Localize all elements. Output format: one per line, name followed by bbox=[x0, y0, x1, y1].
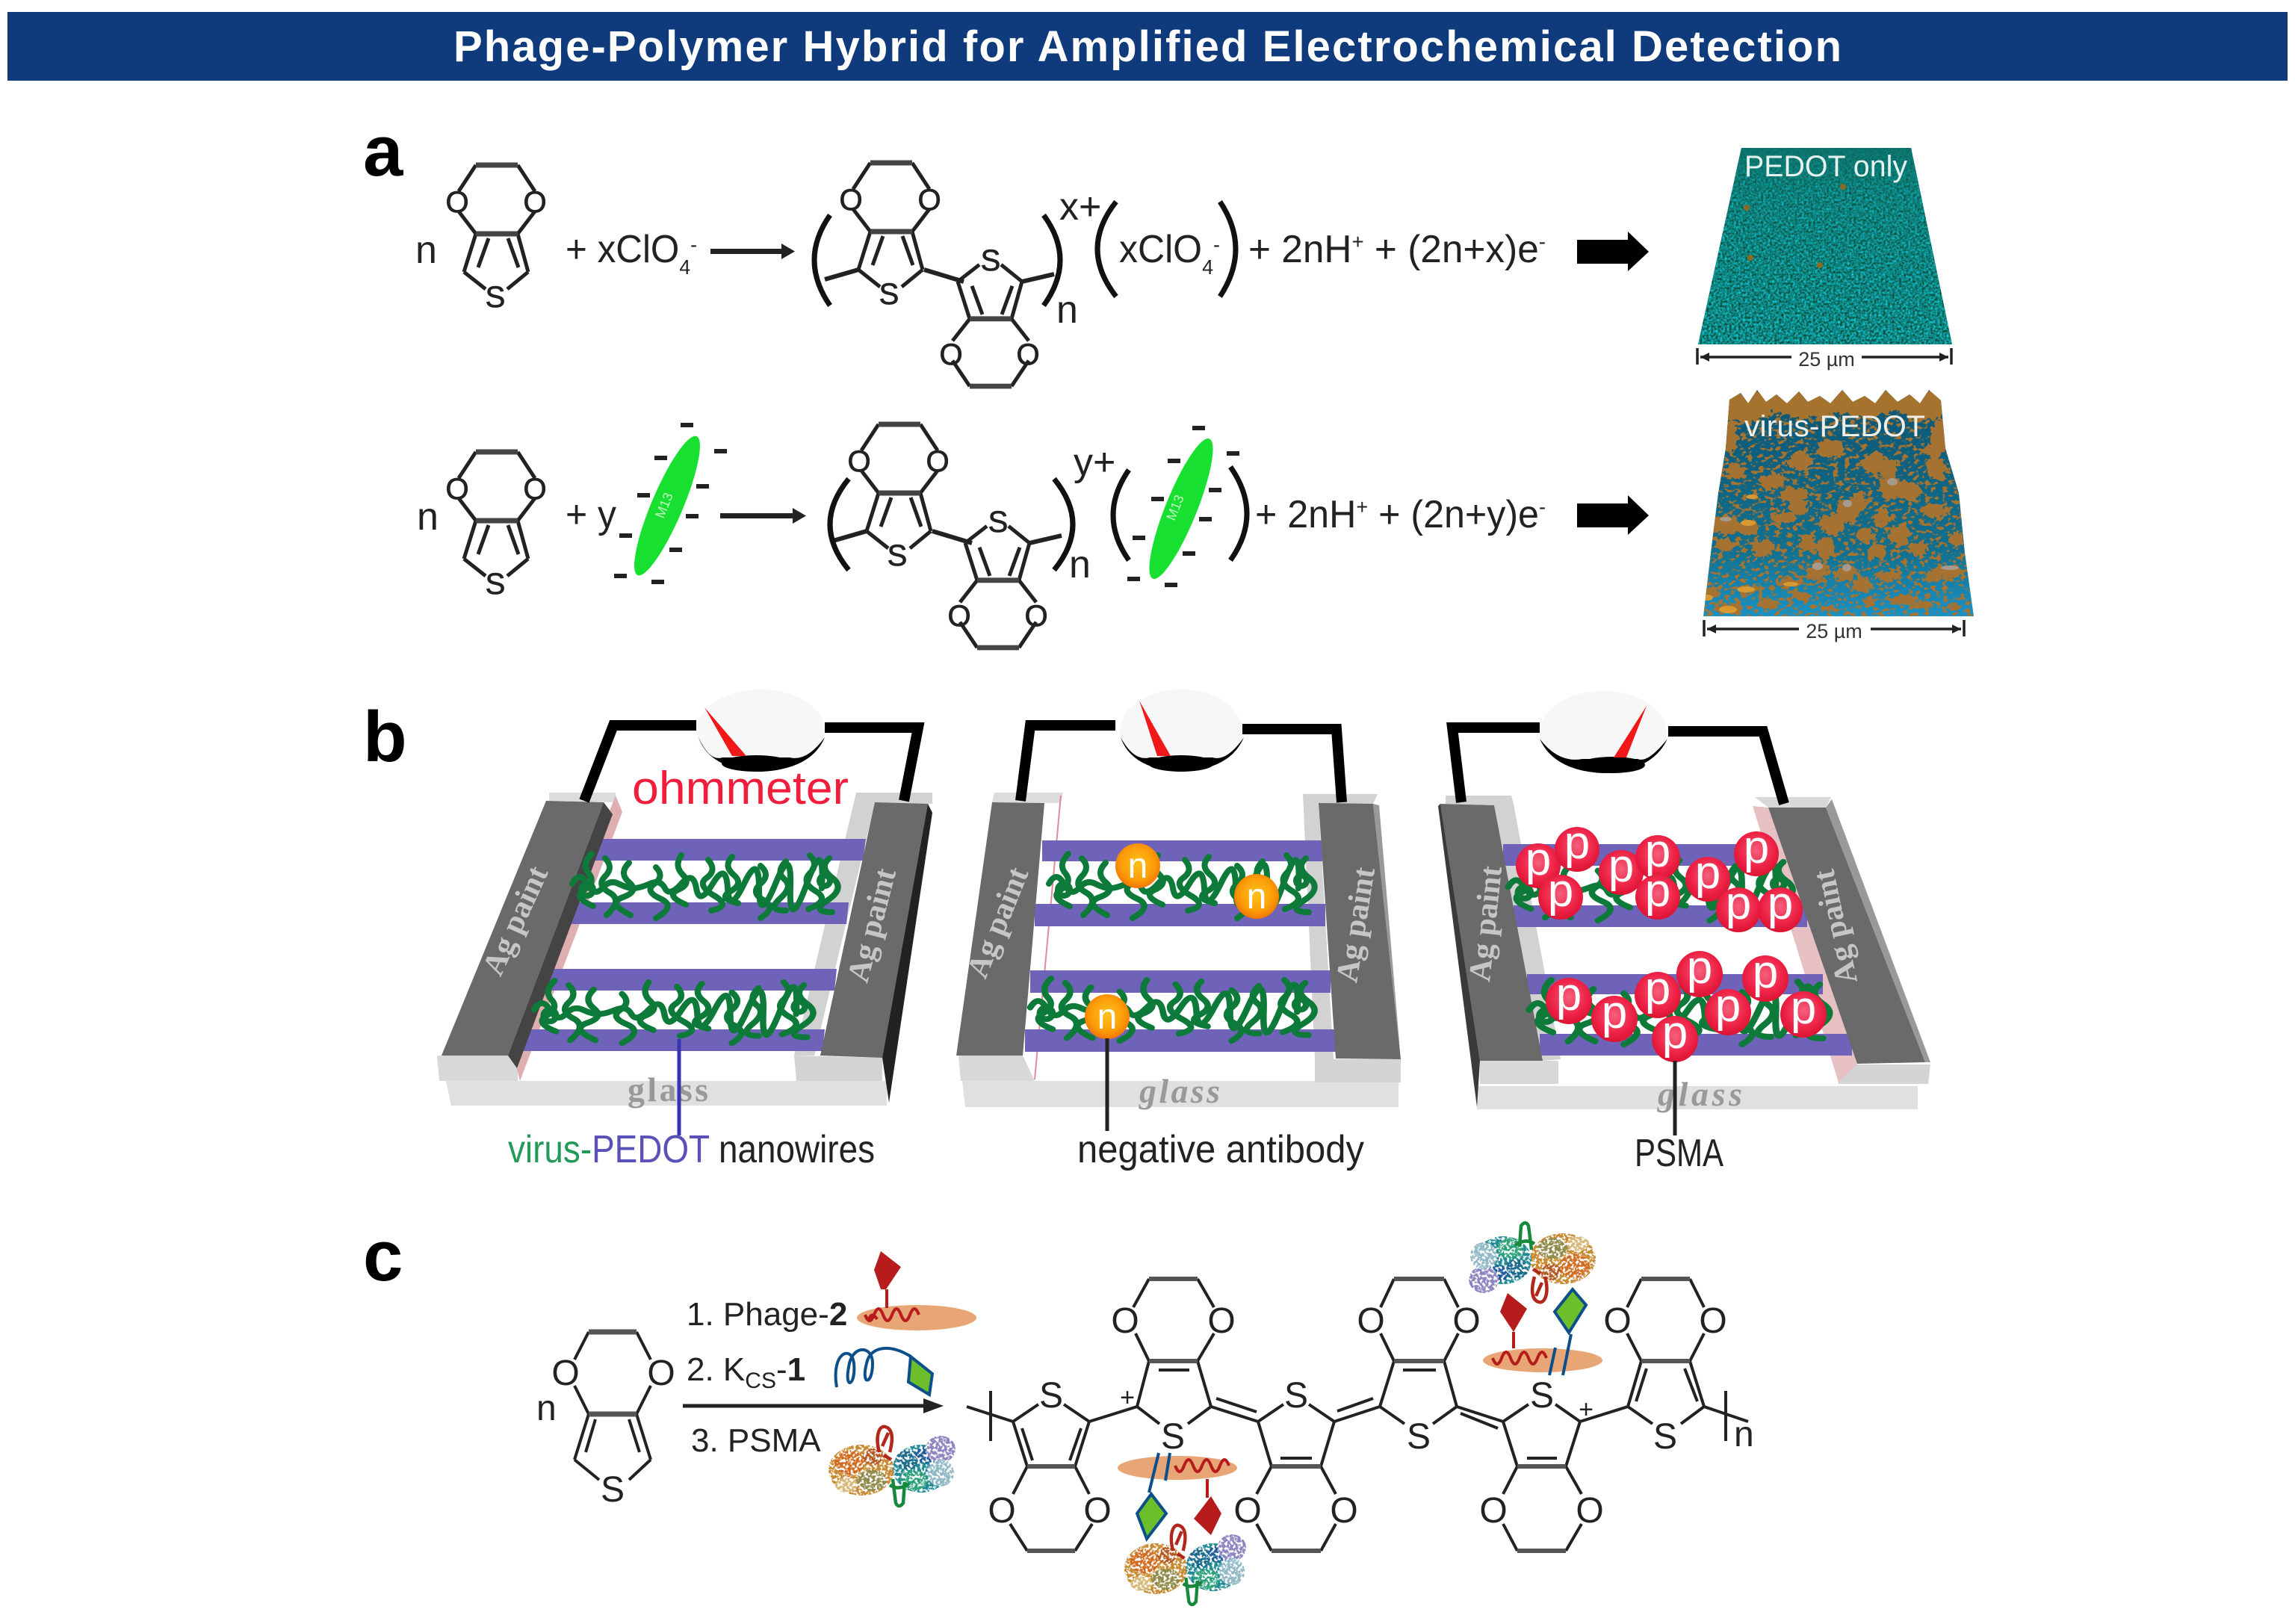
PSMA balls bbox=[1516, 817, 1827, 1062]
PEDOT dimer, row 2: O bbox=[926, 445, 950, 478]
virus-PEDOT green wires bbox=[534, 854, 838, 1043]
EDOT monomer, row 2: n bbox=[417, 495, 439, 539]
negative antibody balls: n bbox=[1247, 877, 1266, 917]
reagent: xClO4-: 4 bbox=[679, 255, 690, 279]
reagent: xClO4-: - bbox=[690, 233, 697, 256]
products text row 1: - bbox=[1539, 230, 1546, 253]
EDOT monomer, row 1: O bbox=[445, 186, 469, 219]
PEDOT dimer, row 2: O bbox=[847, 445, 871, 478]
PEDOT dimer, row 2: n bbox=[1069, 543, 1091, 586]
arrow bbox=[683, 1398, 944, 1413]
ohmmeter label: ohmmeter bbox=[632, 763, 849, 814]
PSMA balls: p bbox=[1526, 834, 1551, 885]
PSMA balls: p bbox=[1791, 982, 1816, 1034]
panel label b: b bbox=[363, 697, 407, 777]
device 2: negative antibody bbox=[956, 689, 1401, 1171]
Ag paint labels bbox=[961, 863, 1382, 985]
atoms: O bbox=[1479, 1491, 1508, 1531]
products text row 2: + 2nH bbox=[1255, 493, 1360, 536]
phage bound above polymer bbox=[1483, 1289, 1602, 1375]
phage bound below polymer bbox=[1118, 1453, 1237, 1539]
atoms: O bbox=[1603, 1301, 1632, 1341]
counter-ion ClO4- bracket: xClO bbox=[1119, 228, 1206, 271]
PEDOT dimer, row 1: S bbox=[879, 278, 899, 311]
PSMA balls: p bbox=[1645, 963, 1670, 1014]
device 1: bare virus-PEDOT bbox=[437, 689, 932, 1171]
glass label: glass bbox=[1139, 1072, 1220, 1110]
green wires bbox=[1030, 854, 1315, 1041]
panel c: phage-polymer synthesis bbox=[363, 1216, 1754, 1605]
phage counter-ion bracket: M13 bbox=[1163, 493, 1187, 522]
PEDOT dimer, row 2: S bbox=[888, 539, 907, 572]
step 2: - bbox=[776, 1351, 787, 1388]
atoms: O bbox=[1576, 1491, 1604, 1531]
Ag paint labels: Ag paint bbox=[1463, 864, 1509, 983]
PEDOT dimer, row 2: O bbox=[1024, 600, 1048, 633]
green wires bbox=[1508, 858, 1830, 1044]
PSMA balls: p bbox=[1602, 987, 1627, 1038]
EDOT monomer: S bbox=[601, 1470, 625, 1510]
reagent: y phage bbox=[566, 423, 727, 584]
ohmmeter dial bbox=[1452, 691, 1784, 804]
PSMA balls: p bbox=[1564, 817, 1590, 869]
bonds bbox=[967, 1279, 1748, 1551]
AFM image: PEDOT only: PEDOT only bbox=[1744, 150, 1907, 183]
Ag paint labels: Ag paint bbox=[841, 865, 903, 986]
PSMA balls: p bbox=[1687, 942, 1712, 994]
EDOT monomer, row 1 bbox=[415, 165, 547, 314]
Ag paint labels: Ag paint bbox=[1330, 865, 1382, 985]
atoms: S bbox=[1407, 1417, 1431, 1457]
PSMA balls: p bbox=[1548, 865, 1573, 917]
PSMA balls: p bbox=[1645, 825, 1670, 877]
products text row 2: + (2n+y)e bbox=[1368, 493, 1539, 536]
Ag paint labels bbox=[476, 861, 903, 986]
panel a: PEDOT electropolymerization bbox=[363, 111, 1980, 648]
EDOT monomer, row 1: O bbox=[523, 186, 547, 219]
caption: PSMA: PSMA bbox=[1635, 1132, 1723, 1175]
PEDOT dimer, row 1: O bbox=[1016, 338, 1040, 371]
atoms: + bbox=[1579, 1395, 1594, 1424]
counter-ion ClO4- bracket bbox=[1097, 202, 1236, 297]
atoms: O bbox=[1207, 1301, 1236, 1341]
products text row 1: + 2nH bbox=[1248, 228, 1353, 271]
Ag paint labels bbox=[1463, 864, 1865, 987]
negative antibody balls: n bbox=[1128, 846, 1148, 886]
atoms: S bbox=[1653, 1417, 1677, 1457]
PSMA balls: p bbox=[1744, 822, 1769, 873]
atoms: S bbox=[1161, 1417, 1185, 1457]
products text row 2: + bbox=[1356, 495, 1368, 518]
block arrow row 1 bbox=[1577, 232, 1649, 271]
negative antibody balls: n bbox=[1097, 997, 1117, 1037]
atoms: S bbox=[1530, 1376, 1554, 1416]
glass label: glass bbox=[628, 1070, 708, 1109]
counter-ion ClO4- bracket: 4 bbox=[1202, 255, 1213, 279]
AFM image: PEDOT only: 25 µm bbox=[1798, 348, 1855, 371]
glass label: glass bbox=[1657, 1075, 1742, 1113]
EDOT monomer, row 1: n bbox=[415, 229, 437, 272]
PEDOT dimer, row 2 bbox=[830, 424, 1115, 648]
PSMA balls: p bbox=[1768, 878, 1793, 929]
step 2: 2. K bbox=[687, 1351, 745, 1388]
AFM image: PEDOT only bbox=[1697, 148, 1952, 371]
PSMA balls: p bbox=[1608, 840, 1634, 892]
atoms bbox=[988, 1301, 1754, 1531]
icon: PSMA protein upper bbox=[1469, 1223, 1596, 1302]
PEDOT dimer, row 1 bbox=[814, 163, 1101, 386]
block arrow row 2 bbox=[1577, 495, 1649, 535]
atoms: n bbox=[1734, 1415, 1754, 1454]
caption: negative antibody: negative antibody bbox=[1077, 1128, 1364, 1171]
atoms: O bbox=[1111, 1301, 1139, 1341]
counter-ion ClO4- bracket: - bbox=[1213, 233, 1220, 256]
reagent list bbox=[683, 1251, 976, 1506]
callout line bbox=[677, 1039, 681, 1135]
phage counter-ion bracket bbox=[1113, 426, 1247, 587]
products text row 1: + bbox=[1352, 230, 1364, 253]
title banner bbox=[7, 12, 2288, 81]
atoms: + bbox=[1120, 1383, 1135, 1412]
negative antibody balls bbox=[1085, 843, 1279, 1039]
step 2: CS bbox=[745, 1369, 776, 1393]
atoms: S bbox=[1284, 1376, 1308, 1416]
callout line bbox=[1106, 1038, 1109, 1131]
atoms: O bbox=[1699, 1301, 1727, 1341]
EDOT monomer, row 2: S bbox=[486, 568, 505, 601]
PEDOT dimer, row 1: x+ bbox=[1059, 185, 1101, 229]
PSMA balls: p bbox=[1715, 980, 1741, 1032]
atoms: O bbox=[988, 1491, 1016, 1531]
EDOT monomer, row 2: O bbox=[445, 473, 469, 506]
products text row 1: + (2n+x)e bbox=[1364, 228, 1539, 271]
AFM image: virus-PEDOT: virus-PEDOT bbox=[1744, 410, 1925, 443]
PEDOT dimer, row 1: S bbox=[981, 244, 1000, 277]
callout line bbox=[1673, 1061, 1676, 1135]
arrow: reaction row 1 bbox=[710, 244, 795, 259]
PSMA balls: p bbox=[1662, 1007, 1688, 1059]
Ag paint labels: Ag paint bbox=[476, 861, 555, 981]
step 2: 1 bbox=[787, 1351, 805, 1388]
PEDOT dimer, row 1: n bbox=[1056, 288, 1078, 332]
EDOT monomer: O bbox=[551, 1354, 580, 1393]
PSMA balls: p bbox=[1695, 847, 1721, 899]
atoms: S bbox=[1039, 1376, 1063, 1416]
PEDOT dimer, row 2: S bbox=[988, 506, 1008, 539]
step 1: 1. Phage-2 bbox=[687, 1296, 847, 1333]
icon: PSMA protein lower bbox=[1124, 1525, 1246, 1605]
products text row 2: - bbox=[1539, 495, 1546, 518]
reagent: xClO4-: + xClO bbox=[566, 228, 685, 271]
atoms: O bbox=[1452, 1301, 1481, 1341]
icon: M13 phage bbox=[614, 423, 727, 584]
EDOT monomer, row 2: O bbox=[523, 473, 547, 506]
EDOT monomer: O bbox=[647, 1354, 675, 1393]
ohmmeter dial bbox=[584, 689, 918, 801]
PEDOT dimer, row 1: O bbox=[917, 184, 941, 217]
panel label c: c bbox=[363, 1216, 403, 1296]
PSMA balls: p bbox=[1645, 865, 1670, 917]
EDOT monomer, row 2 bbox=[417, 452, 547, 601]
atoms: O bbox=[1233, 1491, 1262, 1531]
AFM image: virus-PEDOT: 25 µm bbox=[1806, 620, 1862, 642]
ohmmeter dial bbox=[1020, 689, 1342, 802]
caption: virus-PEDOT nanowires: virus-PEDOT nanowires bbox=[508, 1128, 875, 1171]
icon: Kcs-1 coil bbox=[836, 1348, 932, 1395]
PEDOT dimer, row 1: O bbox=[839, 184, 863, 217]
polymer backbone bbox=[967, 1279, 1754, 1551]
PSMA balls: p bbox=[1753, 946, 1778, 998]
icon: phage 2 bbox=[857, 1251, 976, 1330]
icon: M13 phage: M13 bbox=[652, 491, 676, 520]
step 3: 3. PSMA bbox=[691, 1422, 821, 1459]
Ag paint labels: Ag paint bbox=[1807, 867, 1865, 987]
panel label a: a bbox=[363, 111, 403, 191]
EDOT monomer bbox=[536, 1332, 675, 1510]
device 3: PSMA bbox=[1438, 691, 1930, 1175]
atoms: O bbox=[1330, 1491, 1358, 1531]
atoms: O bbox=[1357, 1301, 1385, 1341]
panel b: ohmmeter devices bbox=[363, 689, 1930, 1175]
EDOT monomer: n bbox=[536, 1389, 557, 1428]
icon: PSMA protein bbox=[829, 1427, 956, 1506]
title banner: Phage-Polymer Hybrid for Amplified Electrochemical Detection bbox=[453, 22, 1842, 71]
PSMA balls: p bbox=[1556, 969, 1582, 1020]
arrow: reaction row 2 bbox=[720, 508, 806, 524]
PSMA balls: p bbox=[1726, 878, 1751, 929]
PEDOT dimer, row 2: y+ bbox=[1074, 441, 1115, 484]
PEDOT dimer, row 1: O bbox=[939, 338, 963, 371]
AFM image: virus-PEDOT bbox=[1696, 388, 1980, 642]
Ag paint labels: Ag paint bbox=[961, 863, 1035, 983]
atoms: O bbox=[1083, 1491, 1112, 1531]
EDOT monomer, row 1: S bbox=[486, 281, 505, 314]
PEDOT dimer, row 2: O bbox=[947, 600, 971, 633]
reagent: y phage: + y bbox=[566, 493, 616, 536]
